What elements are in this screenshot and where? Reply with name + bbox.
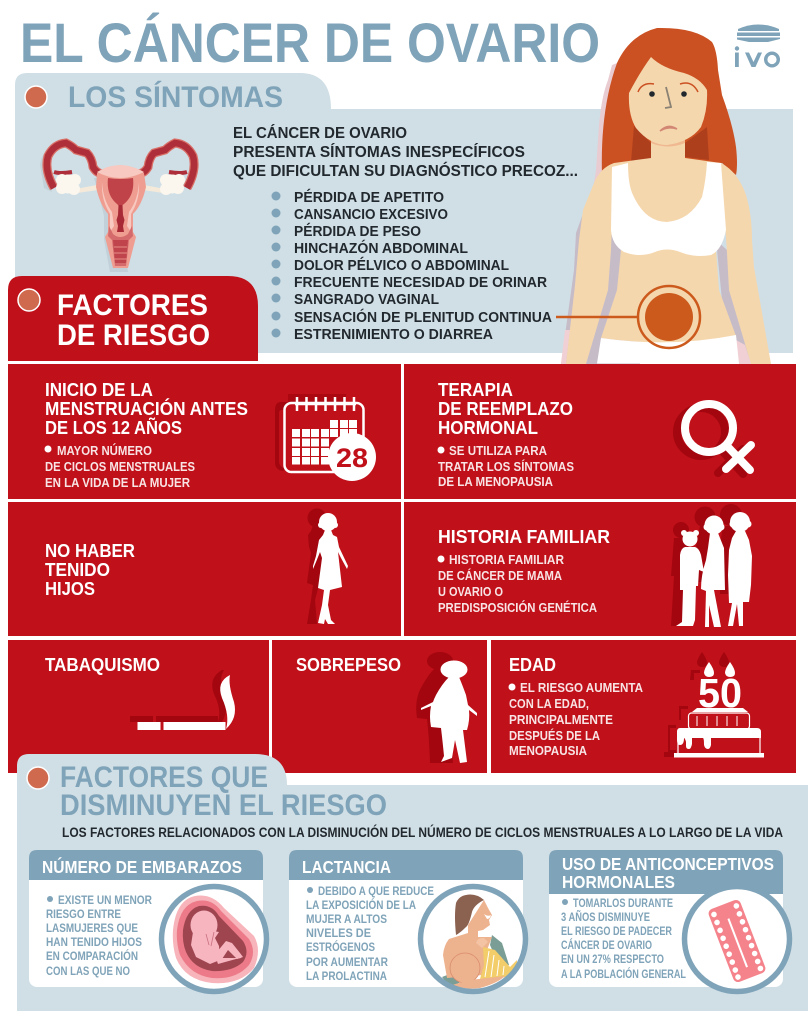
- panel: los síntomas: [15, 73, 793, 353]
- panel: factores que disminuyen: [17, 754, 808, 1011]
- text block: edad: EDAD: [509, 655, 556, 675]
- icon: calendar: 28: [336, 443, 368, 473]
- list: síntomas: [272, 189, 552, 343]
- card: uso de anticonceptivos: HORMONALES: [562, 872, 675, 892]
- card: número de embarazos: NÚMERO DE EMBARAZOS: [42, 856, 242, 877]
- card: número de embarazos: EXISTE UN MENOR: [58, 895, 153, 907]
- illustration: woman: [561, 28, 771, 364]
- text block: historia familiar: PREDISPOSICIÓN GENÉTICA: [438, 600, 597, 615]
- icon: woman silhouette: [307, 508, 348, 624]
- card: uso de anticonceptivos: TOMARLOS DURANTE: [573, 898, 673, 910]
- text block: historia familiar: [438, 527, 610, 615]
- text block: introducción: [233, 123, 578, 180]
- card: número de embarazos: LASMUJERES QUE: [46, 923, 138, 935]
- text block: historia familiar: HISTORIA FAMILIAR: [449, 553, 564, 567]
- text block: historia familiar: HISTORIA FAMILIAR: [438, 527, 610, 547]
- panel: tabaquismo: [8, 640, 269, 773]
- text block: terapia: DE LA MENOPAUSIA: [438, 475, 553, 489]
- list: síntomas: HINCHAZÓN ABDOMINAL: [294, 239, 468, 257]
- panel: terapia: [404, 364, 796, 499]
- card: uso de anticonceptivos: A LA POBLACIÓN GENERAL: [561, 968, 686, 981]
- text block: menstruación: DE LOS 12 AÑOS: [45, 417, 182, 438]
- card: número de embarazos: [29, 850, 263, 987]
- heading: factores que disminuyen el riesgo: [60, 761, 387, 822]
- text block: no haber tenido hijos: NO HABER: [45, 541, 135, 561]
- card: lactancia: LA EXPOSICIÓN DE LA: [306, 899, 416, 912]
- panel: edad: [491, 640, 796, 773]
- card: número de embarazos: RIESGO ENTRE: [46, 909, 121, 921]
- text block: terapia: DE REEMPLAZO: [438, 399, 573, 419]
- icon: breastfeeding mother: [420, 886, 526, 992]
- panel: menstruación: [8, 364, 401, 499]
- icon: overweight woman: [416, 652, 477, 763]
- card: lactancia: NIVELES DE: [306, 928, 371, 940]
- card: uso de anticonceptivos: [549, 850, 783, 987]
- icon: venus symbol: [677, 404, 751, 474]
- text block: no haber tenido hijos: HIJOS: [45, 579, 95, 599]
- text block: edad: DESPUÉS DE LA: [509, 728, 600, 743]
- logo: IVO: [735, 24, 780, 67]
- text block: menstruación: INICIO DE LA: [45, 380, 153, 400]
- icon: birthday cake: [664, 652, 764, 758]
- icon: calendar: [275, 394, 376, 481]
- card: lactancia: ESTRÓGENOS: [306, 941, 375, 954]
- text block: tabaquismo: TABAQUISMO: [45, 655, 160, 675]
- heading: factores que disminuyen el riesgo: DISMINUYEN EL RIESGO: [60, 789, 387, 822]
- list: síntomas: PÉRDIDA DE APETITO: [294, 189, 444, 206]
- card: número de embarazos: EN COMPARACIÓN: [46, 950, 138, 963]
- text block: introducción: PRESENTA SÍNTOMAS INESPECÍFICOS: [233, 142, 525, 161]
- list: síntomas: DOLOR PÉLVICO O ABDOMINAL: [294, 257, 509, 274]
- text block: sobrepeso: SOBREPESO: [296, 655, 401, 675]
- icon: uterus illustration: [40, 143, 194, 272]
- text block: menstruación: MAYOR NÚMERO: [57, 443, 152, 458]
- panel: factores de riesgo tab: [8, 276, 258, 361]
- list: síntomas: SENSACIÓN DE PLENITUD CONTINUA: [294, 308, 552, 326]
- list: síntomas: CANSANCIO EXCESIVO: [294, 207, 448, 223]
- list: síntomas: FRECUENTE NECESIDAD DE ORINAR: [294, 275, 548, 291]
- text block: terapia: HORMONAL: [438, 418, 538, 438]
- icon: contraceptive pill pack: [684, 886, 790, 992]
- icon: fetus in womb: [162, 886, 266, 992]
- card: número de embarazos: HAN TENIDO HIJOS: [46, 937, 142, 949]
- card: número de embarazos: CON LAS QUE NO: [46, 966, 130, 978]
- text block: terapia: SE UTILIZA PARA: [449, 444, 547, 458]
- card: lactancia: [289, 850, 523, 987]
- text block: introducción: EL CÁNCER DE OVARIO: [233, 123, 407, 142]
- list: síntomas: SANGRADO VAGINAL: [294, 292, 439, 308]
- card: lactancia: LACTANCIA: [302, 857, 391, 877]
- list: síntomas: PÉRDIDA DE PESO: [294, 223, 421, 240]
- icon: section dot disminuyen: [27, 767, 49, 789]
- text block: menstruación: MENSTRUACIÓN ANTES: [45, 398, 248, 419]
- heading: factores de riesgo: [57, 289, 210, 352]
- text block: menstruación: EN LA VIDA DE LA MUJER: [45, 476, 190, 490]
- title: EL CÁNCER DE OVARIO: [20, 11, 600, 74]
- card: lactancia: DEBIDO A QUE REDUCE: [318, 886, 434, 898]
- text block: introducción: QUE DIFICULTAN SU DIAGNÓSTICO PRECOZ...: [233, 161, 578, 180]
- heading: los síntomas: LOS SÍNTOMAS: [68, 80, 283, 114]
- text block: terapia: TERAPIA: [438, 380, 513, 400]
- icon: section dot síntomas: [25, 86, 47, 108]
- panel: no haber tenido hijos: [8, 502, 401, 636]
- card: uso de anticonceptivos: EN UN 27% RESPECTO: [561, 954, 664, 966]
- text block: edad: EL RIESGO AUMENTA: [520, 681, 643, 695]
- list: síntomas: ESTRENIMIENTO O DIARREA: [294, 327, 494, 343]
- card: uso de anticonceptivos: USO DE ANTICONCEPTIVOS: [562, 854, 774, 874]
- text block: terapia: [438, 380, 574, 489]
- panel: historia familiar: [404, 502, 796, 636]
- icon: family silhouettes: [671, 504, 752, 627]
- card: lactancia: MUJER A ALTOS: [306, 914, 387, 926]
- text block: historia familiar: U OVARIO O: [438, 585, 503, 599]
- panel: sobrepeso: [272, 640, 487, 773]
- card: uso de anticonceptivos: CÁNCER DE OVARIO: [561, 939, 652, 952]
- card: uso de anticonceptivos: 3 AÑOS DISMINUYE: [561, 911, 650, 924]
- card: lactancia: POR AUMENTAR: [306, 957, 389, 969]
- text block: menstruación: DE CICLOS MENSTRUALES: [45, 460, 195, 474]
- icon: cigarette: [130, 670, 235, 730]
- text block: edad: PRINCIPALMENTE: [509, 713, 613, 727]
- text block: historia familiar: DE CÁNCER DE MAMA: [438, 568, 562, 583]
- heading: factores de riesgo: FACTORES: [57, 289, 208, 322]
- card: uso de anticonceptivos: EL RIESGO DE PADECER: [561, 926, 673, 938]
- text block: edad: CON LA EDAD,: [509, 697, 589, 711]
- text block: no haber tenido hijos: [45, 541, 135, 599]
- text block: menstruación: [44, 380, 248, 490]
- text block: terapia: TRATAR LOS SÍNTOMAS: [438, 459, 574, 474]
- text block: no haber tenido hijos: TENIDO: [45, 560, 110, 580]
- heading: factores de riesgo: DE RIESGO: [57, 319, 210, 352]
- heading: factores que disminuyen el riesgo: FACTORES QUE: [60, 761, 268, 794]
- text block: edad: [508, 655, 643, 758]
- icon: section dot factores: [18, 289, 40, 311]
- card: lactancia: LA PROLACTINA: [306, 971, 387, 983]
- icon: birthday cake: 50: [698, 670, 742, 716]
- text block: edad: MENOPAUSIA: [509, 744, 587, 758]
- callout: plenitud marker: [556, 286, 700, 348]
